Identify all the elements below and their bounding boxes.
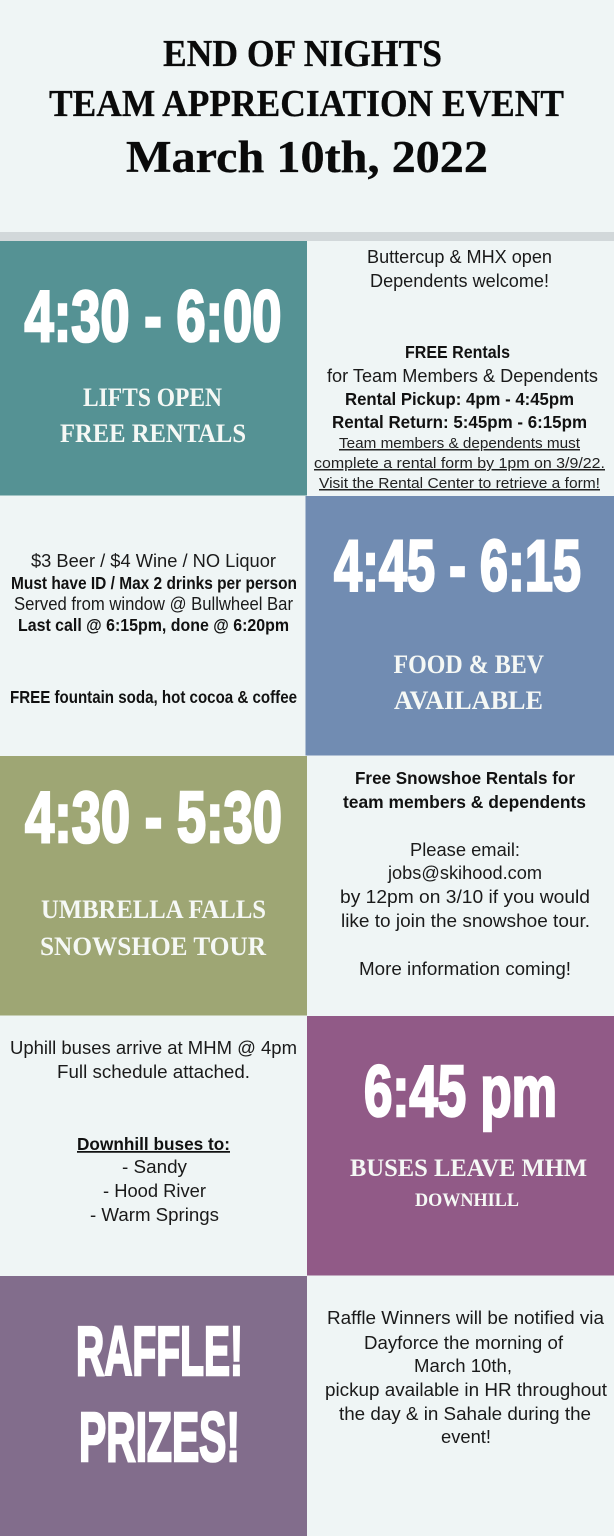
panel: buses leave: BUSES LEAVE MHM — [350, 1155, 587, 1182]
title — [49, 33, 564, 182]
text block: drinks: Served from window @ Bullwheel Bar — [14, 594, 293, 614]
text block: rental details: Visit the Rental Center to retrieve a form! — [319, 475, 600, 492]
text block: drinks: Must have ID / Max 2 drinks per person — [11, 573, 297, 593]
panel: raffle prizes — [0, 1276, 307, 1536]
text block: raffle details: the day & in Sahale during the — [339, 1404, 591, 1424]
panel: snowshoe tour: UMBRELLA FALLS — [41, 895, 266, 924]
text block: snowshoe details: Free Snowshoe Rentals for — [355, 768, 575, 788]
text block: rental details: Buttercup & MHX open — [367, 247, 552, 267]
text block: snowshoe details: by 12pm on 3/10 if you would — [340, 887, 590, 907]
panel: raffle prizes: RAFFLE! — [76, 1312, 243, 1390]
title: TEAM APPRECIATION EVENT — [49, 83, 564, 125]
text block: snowshoe details: More information coming! — [359, 959, 571, 979]
panel: raffle prizes: PRIZES! — [79, 1398, 240, 1476]
text block: snowshoe details: team members & dependents — [343, 792, 586, 812]
text block: rental details: Dependents welcome! — [370, 271, 549, 291]
text block: rental details: FREE Rentals — [405, 342, 510, 362]
text block: bus details: Downhill buses to: — [77, 1134, 230, 1154]
text block: bus details: - Sandy — [122, 1157, 187, 1177]
text block: raffle details — [325, 1308, 607, 1447]
text block: bus details — [10, 1038, 297, 1225]
text block: rental details: complete a rental form by 1pm on 3/9/22. — [314, 455, 605, 472]
text block: snowshoe details: jobs@skihood.com — [387, 863, 542, 883]
text block: drinks: $3 Beer / $4 Wine / NO Liquor — [31, 551, 276, 571]
panel: food and bev: FOOD & BEV — [394, 650, 544, 679]
text block: rental details — [314, 247, 605, 492]
text block: snowshoe details — [340, 768, 590, 979]
panel: food and bev — [306, 496, 614, 756]
text block: snowshoe details: like to join the snowshoe tour. — [341, 911, 590, 931]
text block: raffle details: March 10th, — [414, 1356, 512, 1376]
panel: buses leave: DOWNHILL — [415, 1190, 519, 1211]
panel: lifts open: FREE RENTALS — [60, 419, 246, 448]
text block: snowshoe details: Please email: — [410, 840, 520, 860]
text block: rental details: Rental Return: 5:45pm - 6:15pm — [332, 412, 587, 432]
title: March 10th, 2022 — [126, 132, 488, 182]
panel: lifts open: LIFTS OPEN — [83, 383, 222, 412]
text block: bus details: - Hood River — [103, 1181, 206, 1201]
panel: food and bev: AVAILABLE — [394, 686, 543, 715]
text block: bus details: Uphill buses arrive at MHM @ 4pm — [10, 1038, 297, 1058]
panel: lifts open — [0, 241, 307, 496]
text block: raffle details: pickup available in HR throughout — [325, 1380, 607, 1400]
text block: bus details: - Warm Springs — [90, 1205, 219, 1225]
text block: rental details: Rental Pickup: 4pm - 4:45pm — [345, 389, 574, 409]
text block: drinks: Last call @ 6:15pm, done @ 6:20pm — [18, 615, 289, 635]
text block: raffle details: Dayforce the morning of — [364, 1333, 564, 1353]
text block: drinks: FREE fountain soda, hot cocoa & coffee — [10, 687, 297, 707]
title: END OF NIGHTS — [163, 33, 442, 75]
panel: snowshoe tour: SNOWSHOE TOUR — [40, 932, 266, 961]
text block: rental details: for Team Members & Dependents — [327, 366, 598, 386]
panel: lifts open: 4:30 - 6:00 — [24, 277, 282, 357]
panel: snowshoe tour — [0, 756, 307, 1016]
panel: buses leave — [307, 1016, 614, 1276]
text block: drinks — [10, 551, 297, 707]
text block: rental details: Team members & dependents must — [339, 435, 581, 452]
text block: raffle details: Raffle Winners will be notified via — [327, 1308, 605, 1328]
text block: bus details: Full schedule attached. — [57, 1062, 250, 1082]
panel: snowshoe tour: 4:30 - 5:30 — [25, 778, 282, 858]
text block: raffle details: event! — [441, 1427, 491, 1447]
